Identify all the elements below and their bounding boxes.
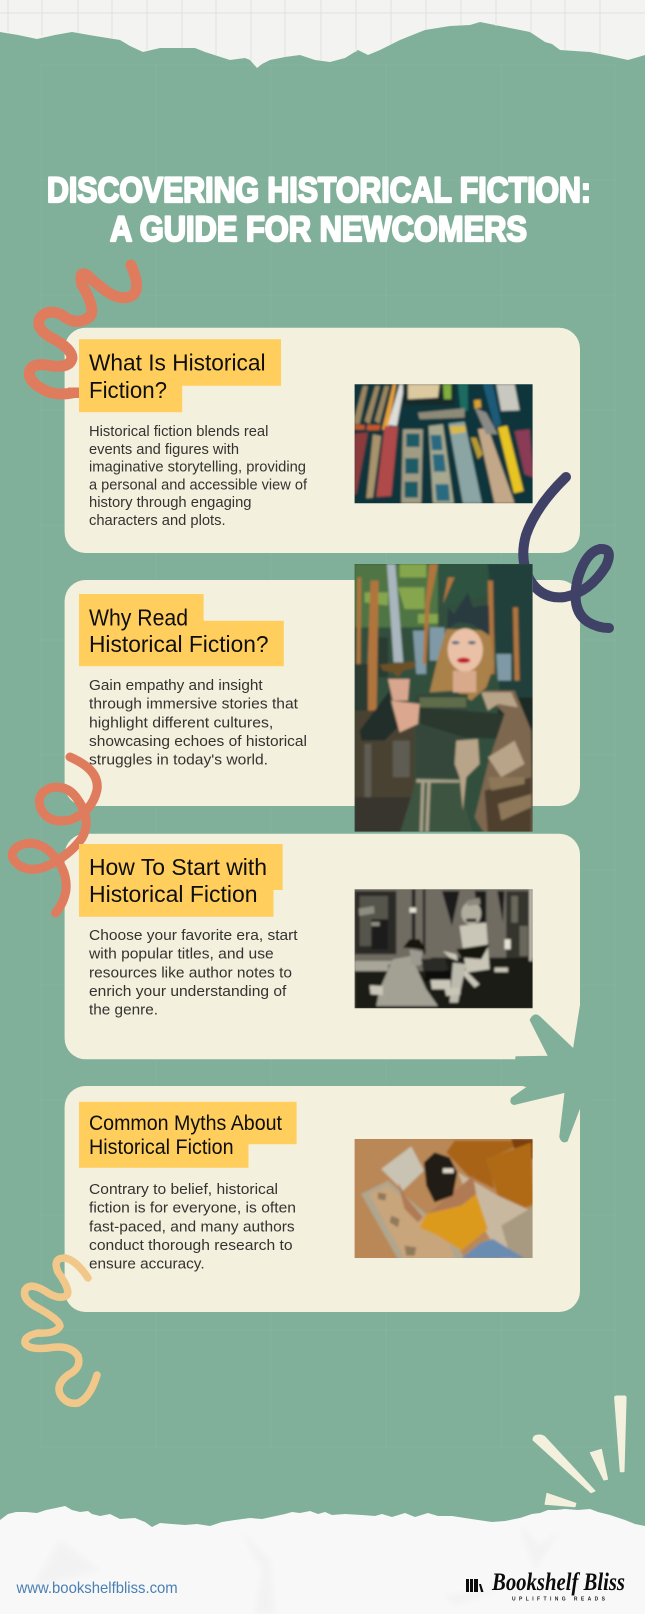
- torn crumpled paper footer: [0, 1506, 645, 1614]
- title: [47, 171, 591, 249]
- heading: why read historical fiction: Why Read: [89, 604, 188, 630]
- doodle: red loop: [12, 757, 97, 913]
- text block: myths: Contrary to belief, historical: [89, 1182, 278, 1198]
- text block: definition: history through engaging: [89, 495, 252, 511]
- heading: how to start: Historical Fiction: [89, 881, 258, 907]
- text block: definition: characters and plots.: [89, 513, 226, 529]
- text block: myths: fiction is for everyone, is often: [89, 1201, 296, 1217]
- heading: what is historical fiction: [79, 339, 281, 412]
- icon: books: [466, 1579, 484, 1592]
- heading: how to start: [79, 844, 283, 917]
- photo: book spines: [354, 384, 533, 504]
- heading: common myths: Historical Fiction: [89, 1135, 234, 1159]
- text block: reasons to read: Gain empathy and insight: [89, 678, 263, 694]
- heading: what is historical fiction: What Is Historical: [89, 350, 266, 376]
- title: A GUIDE FOR NEWCOMERS: [110, 210, 527, 249]
- photo: woman reading on rug: [354, 1139, 533, 1258]
- text block: definition: a personal and accessible view of: [89, 477, 308, 493]
- doodle: green star cut-out: [511, 1005, 590, 1141]
- text block: getting started: the genre.: [89, 1003, 158, 1019]
- panel: why read historical fiction: [65, 557, 580, 841]
- website url: www.bookshelfbliss.com: [16, 1580, 178, 1597]
- doodle: red squiggle top: [29, 265, 137, 398]
- text block: myths: [89, 1182, 296, 1273]
- text block: myths: ensure accuracy.: [89, 1257, 205, 1273]
- text block: reasons to read: [89, 678, 307, 769]
- text block: getting started: [88, 928, 298, 1019]
- logo: bookshelf bliss: [466, 1569, 625, 1602]
- text block: definition: imaginative storytelling, providing: [89, 460, 306, 476]
- text block: getting started: Choose your favorite era, start: [89, 928, 298, 944]
- doodle: yellow squiggle: [25, 1258, 97, 1403]
- text block: definition: Historical fiction blends real: [89, 424, 268, 440]
- photo: queen with sword: [354, 564, 533, 832]
- doodle: cream burst: [533, 1396, 626, 1507]
- doodle: navy loop: [523, 477, 609, 628]
- panel: common myths: [65, 1086, 580, 1312]
- heading: what is historical fiction: Fiction?: [89, 377, 167, 403]
- text block: reasons to read: struggles in today's world.: [89, 753, 268, 769]
- heading: how to start: How To Start with: [89, 854, 267, 880]
- text block: myths: conduct thorough research to: [89, 1238, 293, 1254]
- panel: how to start: [65, 834, 580, 1059]
- text block: definition: events and figures with: [89, 442, 239, 458]
- text block: getting started: with popular titles, and use: [88, 947, 274, 963]
- text block: getting started: enrich your understanding of: [89, 984, 287, 1000]
- text block: definition: [89, 424, 308, 529]
- text block: myths: fast-paced, and many authors: [89, 1219, 295, 1235]
- text block: reasons to read: showcasing echoes of historical: [89, 734, 307, 750]
- heading: why read historical fiction: Historical Fiction?: [89, 631, 269, 657]
- heading: common myths: Common Myths About: [89, 1111, 282, 1135]
- heading: why read historical fiction: [79, 594, 284, 666]
- panel: what is historical fiction: [65, 328, 580, 553]
- text block: reasons to read: through immersive stories that: [89, 697, 298, 713]
- torn graph paper header: [0, 0, 645, 68]
- text block: reasons to read: highlight different cultures,: [89, 715, 273, 731]
- text block: getting started: resources like author notes to: [89, 965, 292, 981]
- logo: bookshelf bliss: UPLIFTING READS: [512, 1596, 606, 1602]
- heading: common myths: [79, 1102, 297, 1168]
- photo: vintage couple black and white: [354, 889, 533, 1008]
